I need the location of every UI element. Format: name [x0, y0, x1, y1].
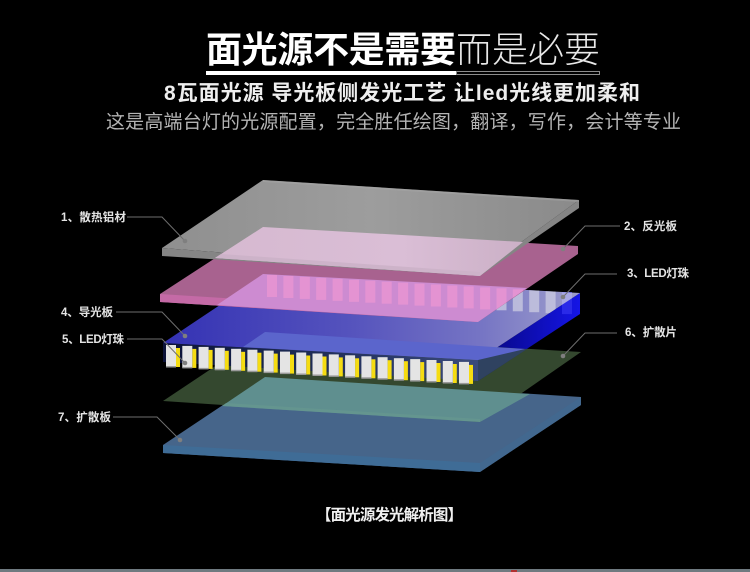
title: 而是必要 [456, 29, 600, 70]
pointer lines [113, 217, 620, 440]
subtitle: 8瓦面光源 导光板侧发光工艺 让led光线更加柔和 [164, 82, 640, 105]
label 6: 6、扩散片 [625, 325, 677, 339]
back LED beads [496, 290, 572, 314]
layer 7: diffusion board [163, 377, 581, 472]
title underline [206, 71, 600, 75]
pointer dots [178, 239, 565, 442]
layer 6: diffusion sheet [163, 333, 581, 422]
description line: 这是高端台灯的光源配置，完全胜任绘图，翻译，写作，会计等专业 [106, 111, 681, 133]
label 7: 7、扩散板 [58, 410, 112, 424]
label 5: 5、LED灯珠 [62, 332, 124, 346]
bottom strip [0, 569, 750, 572]
label 4: 4、导光板 [61, 305, 114, 319]
layer 1: aluminum heat sink [162, 180, 579, 276]
layer 2: reflector [160, 243, 578, 322]
layer 3-5: light guide plate [163, 275, 580, 381]
title [206, 29, 600, 70]
label 3: 3、LED灯珠 [627, 266, 690, 280]
caption: 【面光源发光解析图】 [316, 505, 463, 524]
title: 面光源不是需要 [206, 29, 456, 70]
label 1: 1、散热铝材 [61, 210, 126, 224]
label 2: 2、反光板 [624, 219, 678, 233]
front LED beads [166, 345, 473, 384]
